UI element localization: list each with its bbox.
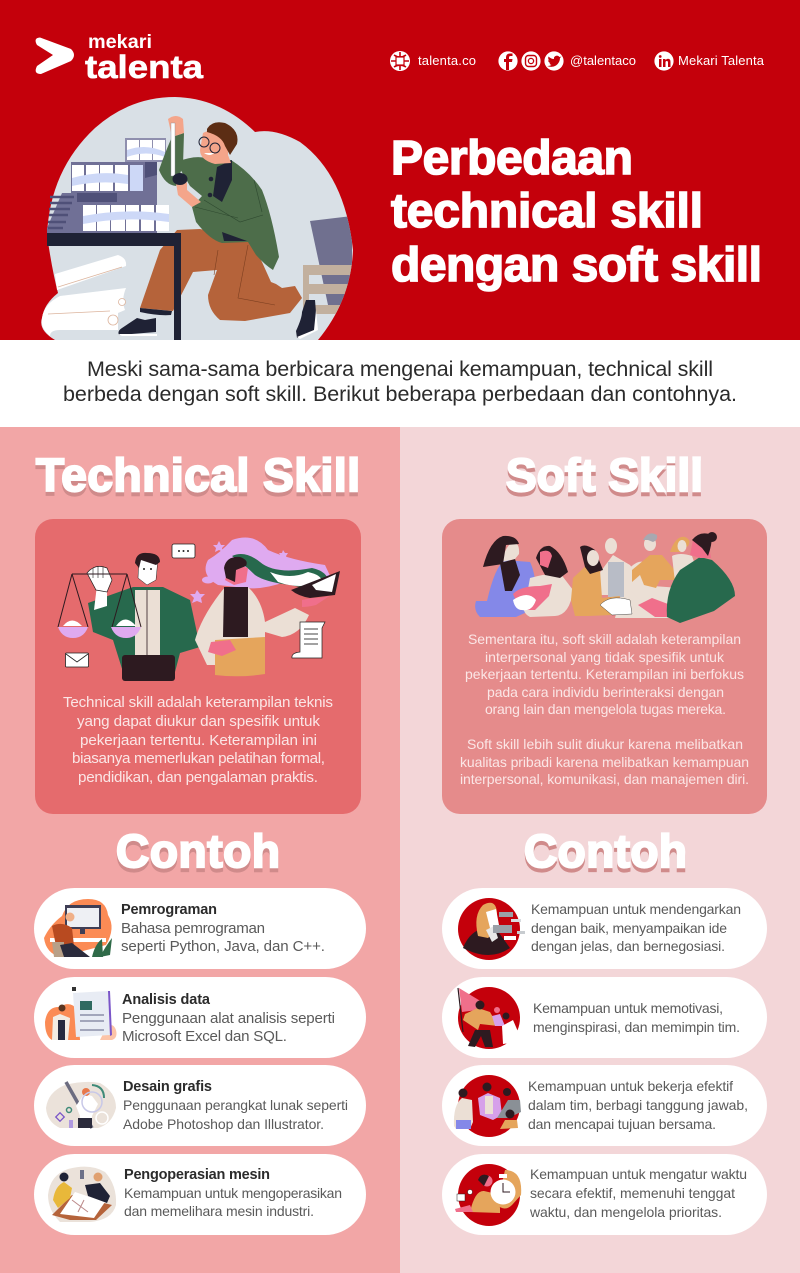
- definition text: Soft skill lebih sulit diukur karena melibatkan: [467, 736, 743, 752]
- definition text: pada cara individu berinteraksi dengan: [487, 684, 724, 700]
- title: dengan soft skill: [391, 239, 762, 292]
- card: technical skill definition: [35, 519, 361, 814]
- title: Perbedaan: [391, 132, 633, 185]
- example text: dan memelihara mesin industri.: [124, 1203, 314, 1219]
- definition text: [63, 694, 333, 786]
- icon: globe: [390, 51, 410, 71]
- example text: [529, 1166, 747, 1220]
- icon: twitter: [544, 51, 564, 71]
- heading: contoh technical: Contoh: [116, 825, 280, 877]
- example text: dan mencapai tujuan bersama.: [528, 1116, 716, 1132]
- panel: soft skill: [400, 427, 800, 1273]
- example text: menginspirasi, dan memimpin tim.: [533, 1019, 740, 1035]
- icon: linkedin: [654, 51, 674, 71]
- definition text: orang lain dan mengelola tugas mereka.: [485, 701, 726, 717]
- definition text: [460, 631, 749, 787]
- panel: technical skill: [0, 427, 400, 1273]
- example: kerja sama: [442, 1065, 767, 1146]
- illustration: man with scales and woman with laptop: [58, 538, 340, 681]
- title: technical skill: [391, 185, 703, 238]
- example text: Penggunaan perangkat lunak seperti: [123, 1097, 348, 1113]
- header panel: [0, 0, 800, 340]
- example: pemrograman: [34, 888, 366, 969]
- heading: technical skill: Technical Skill: [36, 449, 360, 501]
- example: kepemimpinan: [442, 977, 767, 1058]
- linkedin text: Mekari Talenta: [678, 53, 765, 68]
- example text: [533, 1000, 740, 1035]
- arm and hand with ruler: [159, 116, 184, 186]
- trousers: [140, 229, 302, 321]
- definition text: kualitas pribadi karena melibatkan kemampuan: [460, 754, 749, 770]
- illustration: team discussion: [475, 532, 735, 623]
- handle text: @talentaco: [570, 53, 636, 68]
- jacket: [176, 157, 279, 270]
- example text: Penggunaan alat analisis seperti: [122, 1010, 335, 1027]
- heading: contoh soft: Contoh: [524, 829, 687, 881]
- example text: [124, 1167, 342, 1219]
- example: desain grafis: [34, 1065, 366, 1146]
- social links: [390, 51, 765, 71]
- icon: analyst with phone: [45, 987, 116, 1040]
- example text: Microsoft Excel dan SQL.: [122, 1028, 287, 1045]
- intro band: Meski sama-sama berbicara mengenai kemampuan, technical skill: [87, 357, 713, 381]
- example text: waktu, dan mengelola prioritas.: [529, 1204, 722, 1220]
- example text: [122, 992, 335, 1045]
- intro band: [0, 340, 800, 427]
- logo: mekari talenta: mekari: [88, 32, 152, 53]
- logo: mekari talenta: talenta: [85, 49, 203, 85]
- example text: dengan jelas, dan bernegosiasi.: [531, 938, 725, 954]
- example text: [121, 902, 325, 955]
- example text: secara efektif, memenuhi tenggat: [530, 1185, 735, 1201]
- definition text: interpersonal yang tidak spesifik untuk: [485, 649, 725, 665]
- definition text: biasanya memerlukan pelatihan formal,: [72, 750, 325, 767]
- example: analisis data: [34, 977, 366, 1058]
- heading: technical skill: Technical Skill: [36, 453, 360, 505]
- definition text: pekerjaan tertentu. Keterampilan ini: [80, 732, 317, 749]
- table: [47, 233, 181, 340]
- example text: [528, 1078, 748, 1132]
- card: soft skill definition: [442, 519, 767, 814]
- example text: Bahasa pemrograman: [121, 920, 265, 937]
- heading: contoh soft: Contoh: [524, 825, 687, 877]
- logo: mekari talenta: [36, 32, 203, 85]
- icon: leader with flag: [458, 987, 520, 1049]
- example text: dengan baik, menyampaikan ide: [531, 920, 727, 936]
- example text: Kemampuan untuk memotivasi,: [533, 1000, 723, 1016]
- example text: Desain grafis: [123, 1079, 212, 1095]
- definition text: pendidikan, dan pengalaman praktis.: [78, 769, 318, 786]
- example text: Kemampuan untuk mengatur waktu: [530, 1166, 747, 1182]
- website text: talenta.co: [418, 53, 476, 68]
- head: [199, 122, 238, 164]
- example text: Pengoperasian mesin: [124, 1167, 270, 1183]
- icon: woman with clock: [455, 1164, 521, 1226]
- definition text: interpersonal, komunikasi, dan manajemen diri.: [460, 771, 749, 787]
- heading: soft skill: Soft Skill: [506, 453, 703, 505]
- example text: Kemampuan untuk mengoperasikan: [124, 1185, 342, 1201]
- example text: [531, 901, 741, 954]
- title: [391, 132, 762, 292]
- definition text: Technical skill adalah keterampilan teknis: [63, 694, 333, 711]
- example text: Analisis data: [122, 992, 211, 1008]
- example text: Kemampuan untuk mendengarkan: [531, 901, 741, 917]
- hero blob: [41, 97, 353, 340]
- example text: [123, 1079, 348, 1132]
- definition text: yang dapat diukur dan spesifik untuk: [77, 713, 320, 730]
- chair: [303, 216, 353, 314]
- blueprint rolls: [42, 255, 126, 336]
- icon: two engineers at blueprint: [48, 1167, 116, 1222]
- intro band: berbeda dengan soft skill. Berikut beberapa perbedaan dan contohnya.: [63, 382, 737, 406]
- example: manajemen waktu: [442, 1154, 767, 1235]
- icon: woman talking: [458, 898, 525, 960]
- inner shirt: [208, 160, 247, 241]
- example: komunikasi: [442, 888, 767, 969]
- example text: seperti Python, Java, dan C++.: [121, 938, 325, 955]
- example: pengoperasian mesin: [34, 1154, 366, 1235]
- icon: facebook: [498, 51, 518, 71]
- example text: Pemrograman: [121, 902, 217, 918]
- example text: Kemampuan untuk bekerja efektif: [528, 1078, 733, 1094]
- icon: programmer at desk: [44, 899, 112, 957]
- lower hand: [172, 173, 201, 207]
- heading: contoh technical: Contoh: [116, 829, 280, 881]
- building model: [47, 138, 169, 233]
- hero illustration: man measuring building model: [41, 97, 353, 340]
- shoes: [118, 300, 318, 339]
- heading: soft skill: Soft Skill: [506, 449, 703, 501]
- example text: dalam tim, berbagi tanggung jawab,: [528, 1097, 748, 1113]
- definition text: Sementara itu, soft skill adalah keterampilan: [468, 631, 741, 647]
- icon: instagram: [521, 51, 541, 71]
- example text: Adobe Photoshop dan Illustrator.: [123, 1116, 324, 1132]
- icon: team working together: [454, 1075, 521, 1137]
- definition text: pekerjaan tertentu. Keterampilan ini berfokus: [465, 666, 744, 682]
- icon: graphic designer: [46, 1082, 116, 1128]
